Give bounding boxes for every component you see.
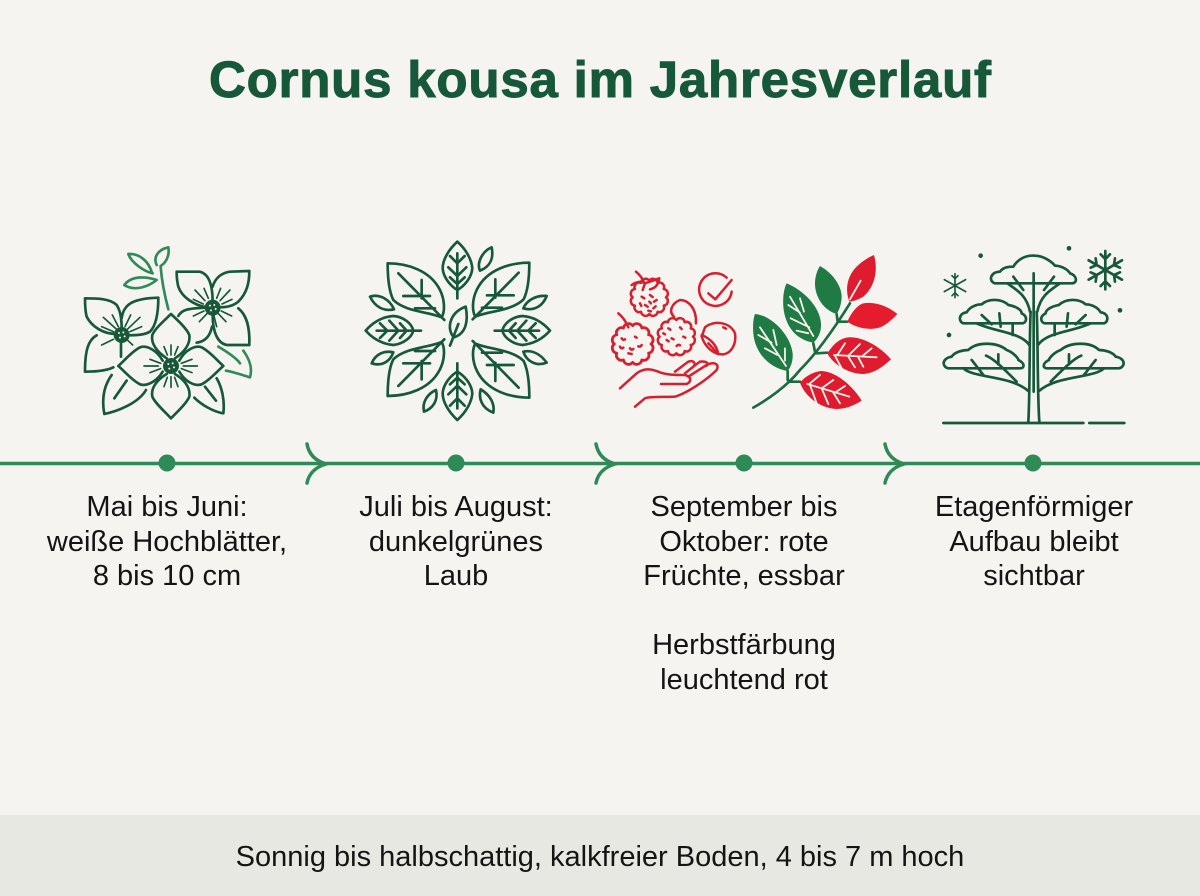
title: Cornus kousa im Jahresverlauf <box>209 51 992 108</box>
text: Juli bis August: Juli bis August: <box>359 491 553 523</box>
icon: red fruits and hand <box>612 272 735 407</box>
text: Mai bis Juni: weiße Hochblätter, <box>46 526 287 558</box>
dot: Etagenförmiger Aufbau <box>1024 454 1042 472</box>
panel: Etagenförmiger Aufbau <box>935 246 1133 592</box>
icon: layered winter tree <box>943 246 1124 423</box>
dot: Mai bis Juni <box>158 454 176 472</box>
timeline axis <box>0 444 1200 483</box>
panel: Mai bis Juni <box>46 247 287 592</box>
text: September bis Oktober: Oktober: rote <box>659 526 829 558</box>
text: September bis Oktober: September bis <box>650 491 838 523</box>
text: Mai bis Juni: Mai bis Juni: <box>86 491 248 523</box>
text: Juli bis August: dunkelgrünes <box>369 526 543 558</box>
panel: Juli bis August <box>359 242 553 592</box>
footer band <box>0 815 1200 896</box>
text: Etagenförmiger Aufbau: Aufbau bleibt <box>949 526 1119 558</box>
dot: Juli bis August <box>448 454 464 472</box>
icon: autumn branch <box>753 255 897 409</box>
text: Juli bis August: Laub <box>424 560 488 592</box>
text: September bis Oktober: Herbstfärbung <box>652 629 836 661</box>
icon: flowers <box>85 247 251 418</box>
panel: September bis Oktober <box>612 255 897 696</box>
text: Etagenförmiger Aufbau: Etagenförmiger <box>935 491 1133 523</box>
icon: foliage wreath <box>366 242 550 420</box>
footer band: Sonnig bis halbschattig, kalkfreier Boden, 4 bis 7 m hoch <box>236 841 964 873</box>
text: September bis Oktober: Früchte, essbar <box>643 560 845 592</box>
text: Mai bis Juni: 8 bis 10 cm <box>93 560 241 592</box>
dot: September bis Oktober <box>736 454 752 472</box>
text: September bis Oktober: leuchtend rot <box>660 664 828 696</box>
text: Etagenförmiger Aufbau: sichtbar <box>983 560 1085 592</box>
